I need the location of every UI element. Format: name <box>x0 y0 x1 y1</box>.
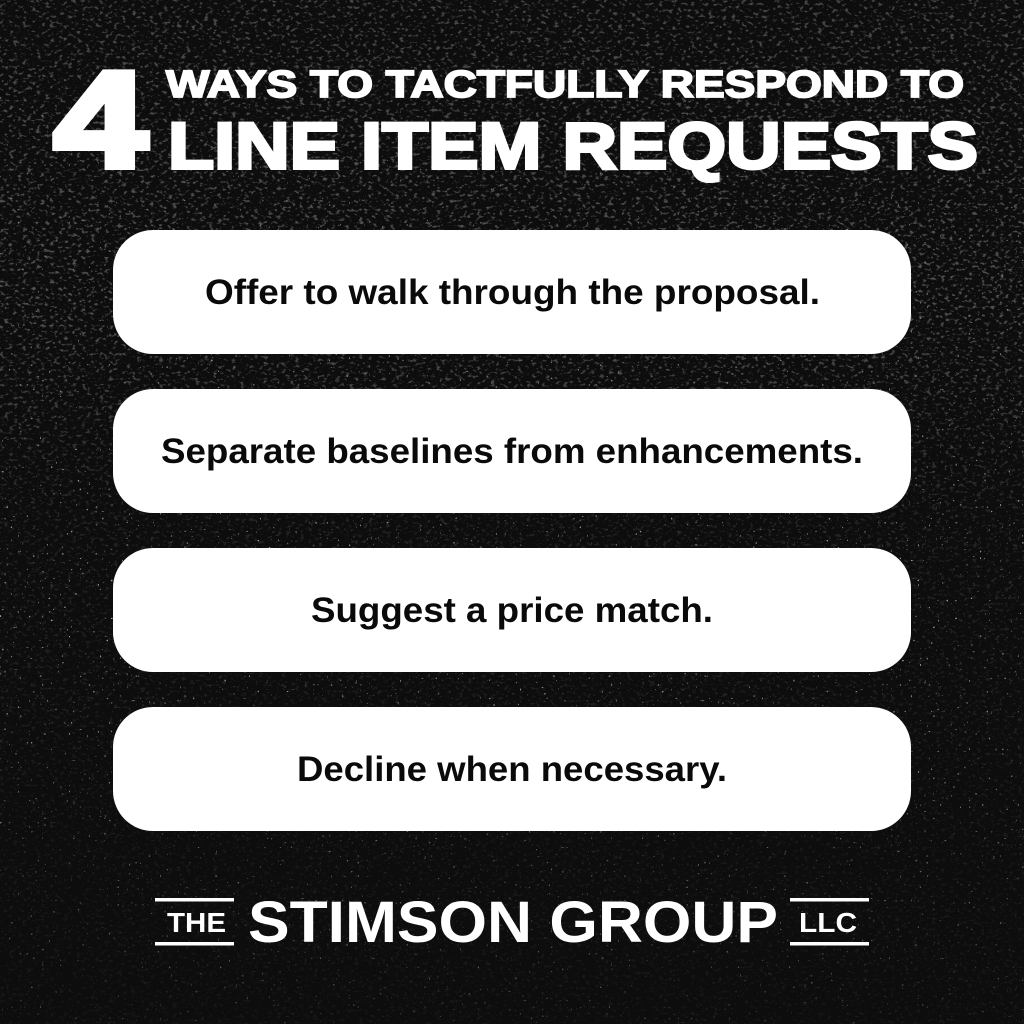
logo word THE: THE <box>167 907 226 938</box>
panel: tip 4 <box>113 707 911 831</box>
logo word LLC: LLC <box>799 907 857 938</box>
logo wordmark: STIMSON GROUP <box>248 890 778 955</box>
tip 1 text: Offer to walk through the proposal. <box>205 273 820 312</box>
panel: tip 3 <box>113 548 911 672</box>
title line 2: LINE ITEM REQUESTS <box>168 108 978 182</box>
title numeral 4: 4 <box>54 44 147 196</box>
title <box>54 44 978 196</box>
tip 4 text: Decline when necessary. <box>297 750 727 789</box>
panel: tip 2 <box>113 389 911 513</box>
tip 3 text: Suggest a price match. <box>311 591 713 630</box>
title line 1: WAYS TO TACTFULLY RESPOND TO <box>166 64 964 106</box>
panel: tip 1 <box>113 230 911 354</box>
tip 2 text: Separate baselines from enhancements. <box>161 432 863 471</box>
logo: The Stimson Group LLC <box>155 890 869 955</box>
